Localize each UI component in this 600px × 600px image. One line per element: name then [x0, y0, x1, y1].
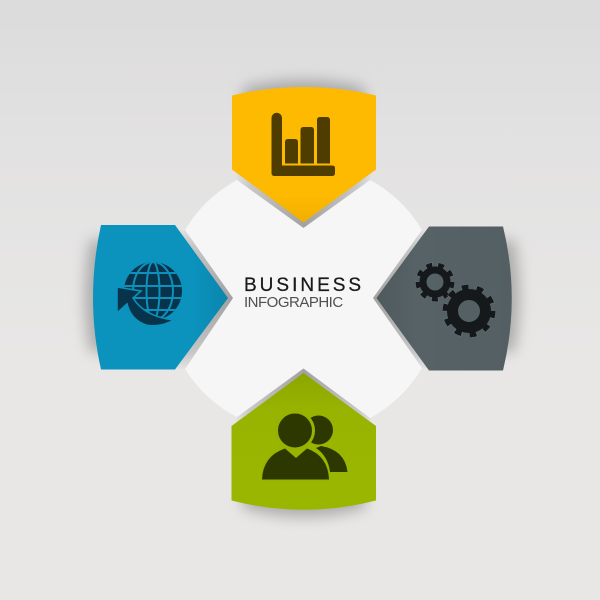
icon: globe with arrow: [117, 262, 186, 326]
panel: yellow chart: [232, 87, 376, 222]
small gear: [418, 265, 452, 299]
icon: gears: [418, 265, 493, 335]
title: [244, 275, 364, 311]
panel shadows: [85, 80, 520, 517]
icon: bar chart: [272, 113, 335, 176]
subheading: infographic: INFOGRAPHIC: [244, 294, 343, 311]
icon: people: [262, 412, 348, 480]
center white cross: [185, 180, 422, 418]
heading: business: BUSINESS: [244, 275, 364, 296]
panel: green people: [232, 373, 376, 510]
large gear: [445, 287, 493, 335]
notch bevels: [177, 171, 431, 427]
panel: grey gears: [376, 226, 512, 370]
panel: blue globe: [93, 225, 228, 370]
